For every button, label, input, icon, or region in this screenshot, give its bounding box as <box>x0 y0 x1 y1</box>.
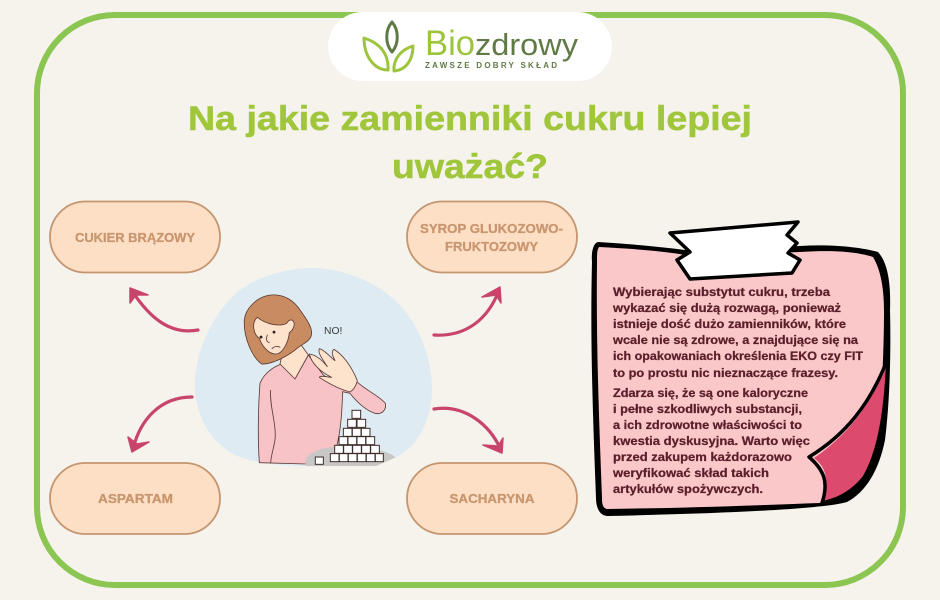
note text: weryfikować skład takich <box>612 468 769 480</box>
arrow: to syrop <box>434 287 501 335</box>
note text: i pełne szkodliwych substancji, <box>613 404 802 416</box>
note paper <box>597 247 884 509</box>
pill: aspartam <box>50 463 220 534</box>
note text: artykułów spożywczych. <box>613 484 763 496</box>
raised hand <box>309 349 357 392</box>
pill: aspartam: ASPARTAM <box>98 492 173 506</box>
blue blob background <box>195 268 432 466</box>
paper tape <box>670 222 800 279</box>
pill: syrop glukozowo-fruktozowy: FRUKTOZOWY <box>445 240 539 254</box>
page curl <box>814 362 886 501</box>
pill: syrop glukozowo-fruktozowy <box>407 202 577 272</box>
pill: sacharyna: SACHARYNA <box>450 492 534 506</box>
note text: istnieje dość dużo zamienników, które <box>613 319 846 331</box>
sugar cubes <box>315 410 383 464</box>
illustration: woman refusing sugar <box>195 268 432 466</box>
page curl fold line <box>809 358 888 503</box>
note text: wcale nie są zdrowe, a znajdujące się na <box>612 335 859 347</box>
logo background pill <box>328 12 612 81</box>
pill: cukier brązowy: CUKIER BRĄZOWY <box>75 231 196 245</box>
pill: syrop glukozowo-fruktozowy: SYROP GLUKOZOWO- <box>420 222 563 236</box>
logo: Biozdrowy: zdrowy <box>475 27 579 62</box>
arrow: to sacharyna <box>434 408 503 453</box>
neck and chest <box>280 343 308 379</box>
note text: to po prostu nic nieznaczące frazesy. <box>613 368 838 380</box>
note text: a ich zdrowotne właściwości to <box>613 420 802 432</box>
pill: cukier brązowy <box>50 202 220 272</box>
woman figure <box>244 295 395 466</box>
title: Na jakie zamienniki cukru lepiej <box>188 100 752 138</box>
logo: Biozdrowy <box>328 12 612 81</box>
logo tagline: ZAWSZE DOBRY SKŁAD <box>425 61 557 70</box>
sleeve line <box>271 390 275 463</box>
arrow: to aspartam <box>128 397 192 452</box>
note text: wykazać się dużą rozwagą, ponieważ <box>612 303 841 315</box>
note outline <box>591 242 890 516</box>
note text: Wybierając substytut cukru, trzeba <box>613 287 831 299</box>
logo wordmark: Bio <box>425 24 475 63</box>
note text: Zdarza się, że są one kaloryczne <box>613 388 808 400</box>
note text: kwestia dyskusyjna. Warto więc <box>613 436 811 448</box>
eyes and mouth <box>260 331 276 339</box>
note text: ich opakowaniach określenia EKO czy FIT <box>613 351 863 363</box>
face <box>254 317 294 354</box>
note panel <box>591 222 890 516</box>
icon: leaves <box>364 22 413 71</box>
note text: przed zakupem każdorazowo <box>613 452 792 464</box>
title: uważać? <box>392 148 548 186</box>
note text <box>612 287 863 496</box>
title <box>188 100 752 186</box>
plate <box>305 446 395 466</box>
arrow: to cukier brązowy <box>130 288 198 331</box>
pill: sacharyna <box>407 463 577 534</box>
speech: NO!: NO! <box>324 326 342 337</box>
hair <box>244 295 312 364</box>
sweater <box>258 355 386 464</box>
